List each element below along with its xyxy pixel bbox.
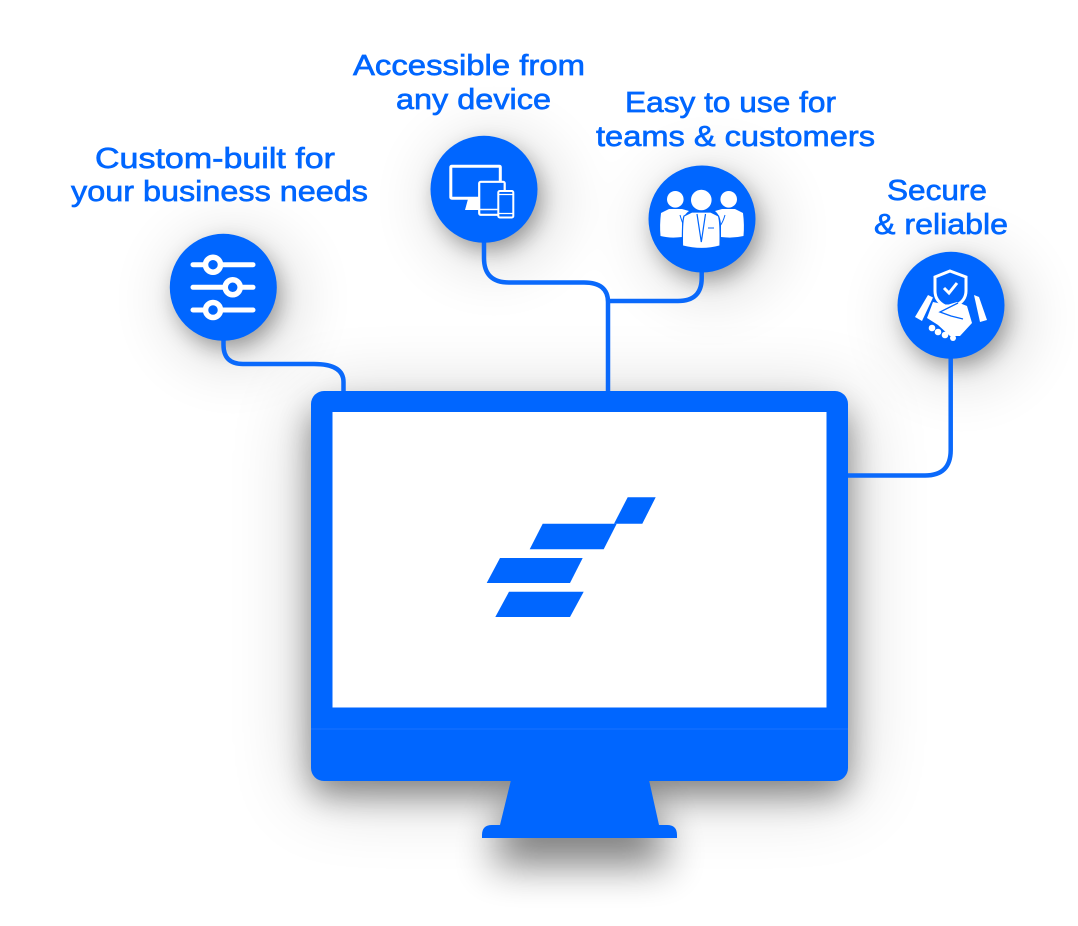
monitor (311, 391, 848, 838)
monitor body (311, 391, 848, 781)
monitor stand (482, 780, 677, 838)
heading: easy to use: teams & customers (596, 121, 875, 153)
heading: secure: Secure (887, 175, 987, 207)
heading: custom-built (71, 143, 368, 208)
heading: custom-built: Custom-built for (95, 143, 336, 175)
heading: secure (874, 175, 1008, 241)
heading: accessible: Accessible from (353, 50, 585, 82)
connector: custom-built to monitor (224, 338, 344, 393)
heading: easy to use: Easy to use for (625, 87, 837, 119)
logo (487, 497, 656, 617)
connector: accessible to monitor (484, 240, 608, 393)
icon: team (648, 166, 756, 272)
icon: devices (430, 136, 538, 243)
connector: secure to monitor (846, 356, 951, 476)
heading: accessible (353, 50, 585, 116)
icon: sliders (170, 234, 277, 341)
soft shadows (167, 135, 1027, 866)
heading: accessible: any device (396, 84, 551, 116)
monitor screen (332, 412, 826, 708)
connector: easy to use to monitor (608, 270, 702, 301)
heading: secure: & reliable (874, 209, 1008, 241)
icon: handshake and shield (898, 252, 1004, 359)
heading: custom-built: your business needs (71, 176, 368, 208)
heading: easy to use (596, 87, 875, 153)
